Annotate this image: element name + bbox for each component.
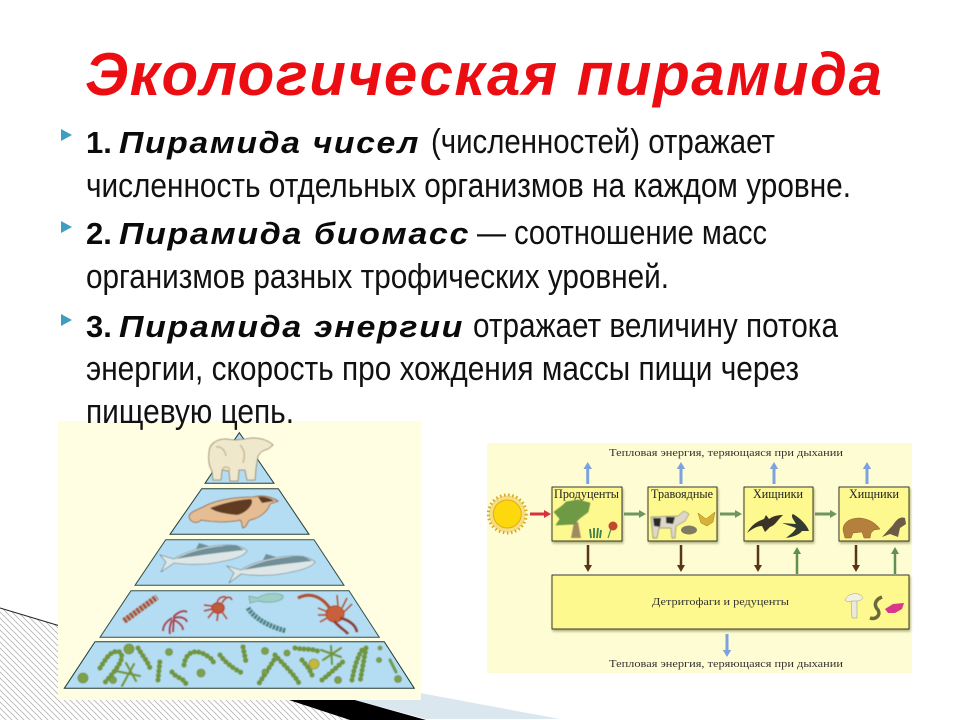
- icon: butterfly: [698, 512, 715, 526]
- box: carnivores 1: Хищники: [753, 486, 803, 501]
- box: producers: Продуценты: [554, 486, 619, 501]
- icon: grass: [590, 528, 601, 538]
- bullet 3: pyramid of energy, first lines: энергии, скорость про хождения массы пищи через: [86, 350, 799, 388]
- bullet 1: pyramid of numbers: (численностей) отражает: [431, 123, 775, 161]
- title: Экологическая пирамида: [85, 41, 882, 108]
- bullet 3: pyramid of energy, first lines: отражает величину потока: [473, 307, 838, 345]
- bullet 2: pyramid of biomass: Пирамида биомасс: [119, 216, 470, 251]
- icon: crab left: [163, 611, 187, 634]
- arrow: sunlight into producers: [530, 510, 551, 518]
- panel: energy flow diagram: [487, 443, 912, 673]
- bullet 3: pyramid of energy, first lines: Пирамида энергии: [119, 309, 464, 344]
- icon: brown bear: [843, 518, 880, 538]
- bullet 2: pyramid of biomass: организмов разных трофических уровней.: [86, 258, 669, 296]
- heading: heat loss top: Тепловая энергия, теряющаяся при дыхании: [609, 447, 843, 459]
- bullet 1: pyramid of numbers: численность отдельных организмов на каждом уровне.: [86, 167, 851, 205]
- box: herbivores: [648, 486, 717, 541]
- arrows: down to detritivores: [584, 545, 860, 572]
- arrow: heat loss down: [723, 634, 731, 657]
- heading: heat loss bottom: Тепловая энергия, теряющаяся при дыхании: [609, 658, 843, 670]
- pyramid tier 1: apex with polar bear: [205, 433, 274, 483]
- panel: ecological pyramid illustration: [58, 421, 421, 700]
- bullet list: [61, 123, 851, 388]
- pyramid tier 5: plankton and algae: [64, 642, 414, 688]
- icon: bat: [747, 515, 783, 533]
- box: carnivores 2: [839, 486, 909, 541]
- arrows: energy transfer between levels: [624, 510, 837, 518]
- pyramid tier 2: seal: [170, 489, 309, 534]
- icon: flower: [608, 522, 618, 538]
- icon: sun: [488, 495, 526, 533]
- bullet 3: pyramid of energy, first lines: [61, 307, 838, 388]
- icon: tree: [554, 500, 590, 538]
- icon: polar bear: [209, 438, 273, 481]
- pyramid tier 4: crustaceans and worms: [100, 591, 379, 637]
- icon: crab middle: [204, 597, 232, 621]
- box: producers: [552, 486, 622, 541]
- icon: red worm: [124, 597, 157, 621]
- icon: algae chains and plankton cells: [78, 644, 402, 686]
- icon: fish 1: [160, 543, 247, 572]
- bullet 2: pyramid of biomass: [61, 214, 767, 296]
- icon: cow: [651, 511, 689, 538]
- bullet 2: pyramid of biomass: — соотношение масс: [477, 214, 767, 252]
- decorative hatched corner background: [0, 608, 560, 720]
- arrows: heat loss up: [584, 462, 871, 484]
- pyramid tier 3: fish: [135, 540, 344, 585]
- icon: seal: [189, 496, 278, 528]
- bullet 3: last line over the panel edge: пищевую цепь.: [86, 393, 294, 431]
- bullet 2: pyramid of biomass: 2.: [86, 216, 112, 251]
- icon: fish 2: [227, 554, 315, 583]
- arrows: up from detritivores: [793, 547, 899, 574]
- icon: orange scorpion-like crustacean: [298, 595, 357, 634]
- box: herbivores: Травоядные: [651, 486, 713, 501]
- bullet 3: pyramid of energy, first lines: 3.: [86, 309, 112, 344]
- icon: small pale fish: [249, 594, 283, 603]
- bullet 1: pyramid of numbers: 1.: [86, 125, 112, 160]
- box: carnivores 1: [744, 486, 813, 541]
- box: detritivores and decomposers: [552, 575, 909, 629]
- bullet 1: pyramid of numbers: Пирамида чисел: [119, 125, 420, 160]
- box: carnivores 2: Хищники: [849, 486, 899, 501]
- icon: eagle: [882, 517, 906, 537]
- box: detritivores and decomposers: Детритофаги и редуценты: [652, 596, 790, 608]
- icon: green bristle worm: [248, 608, 286, 631]
- icon: mushroom: [845, 594, 863, 618]
- icon: swallow: [782, 514, 809, 538]
- icon: mouse: [681, 526, 697, 534]
- icon: earthworm: [870, 597, 882, 618]
- bullet 1: pyramid of numbers: [61, 123, 851, 205]
- icon: pink fungus: [885, 603, 904, 613]
